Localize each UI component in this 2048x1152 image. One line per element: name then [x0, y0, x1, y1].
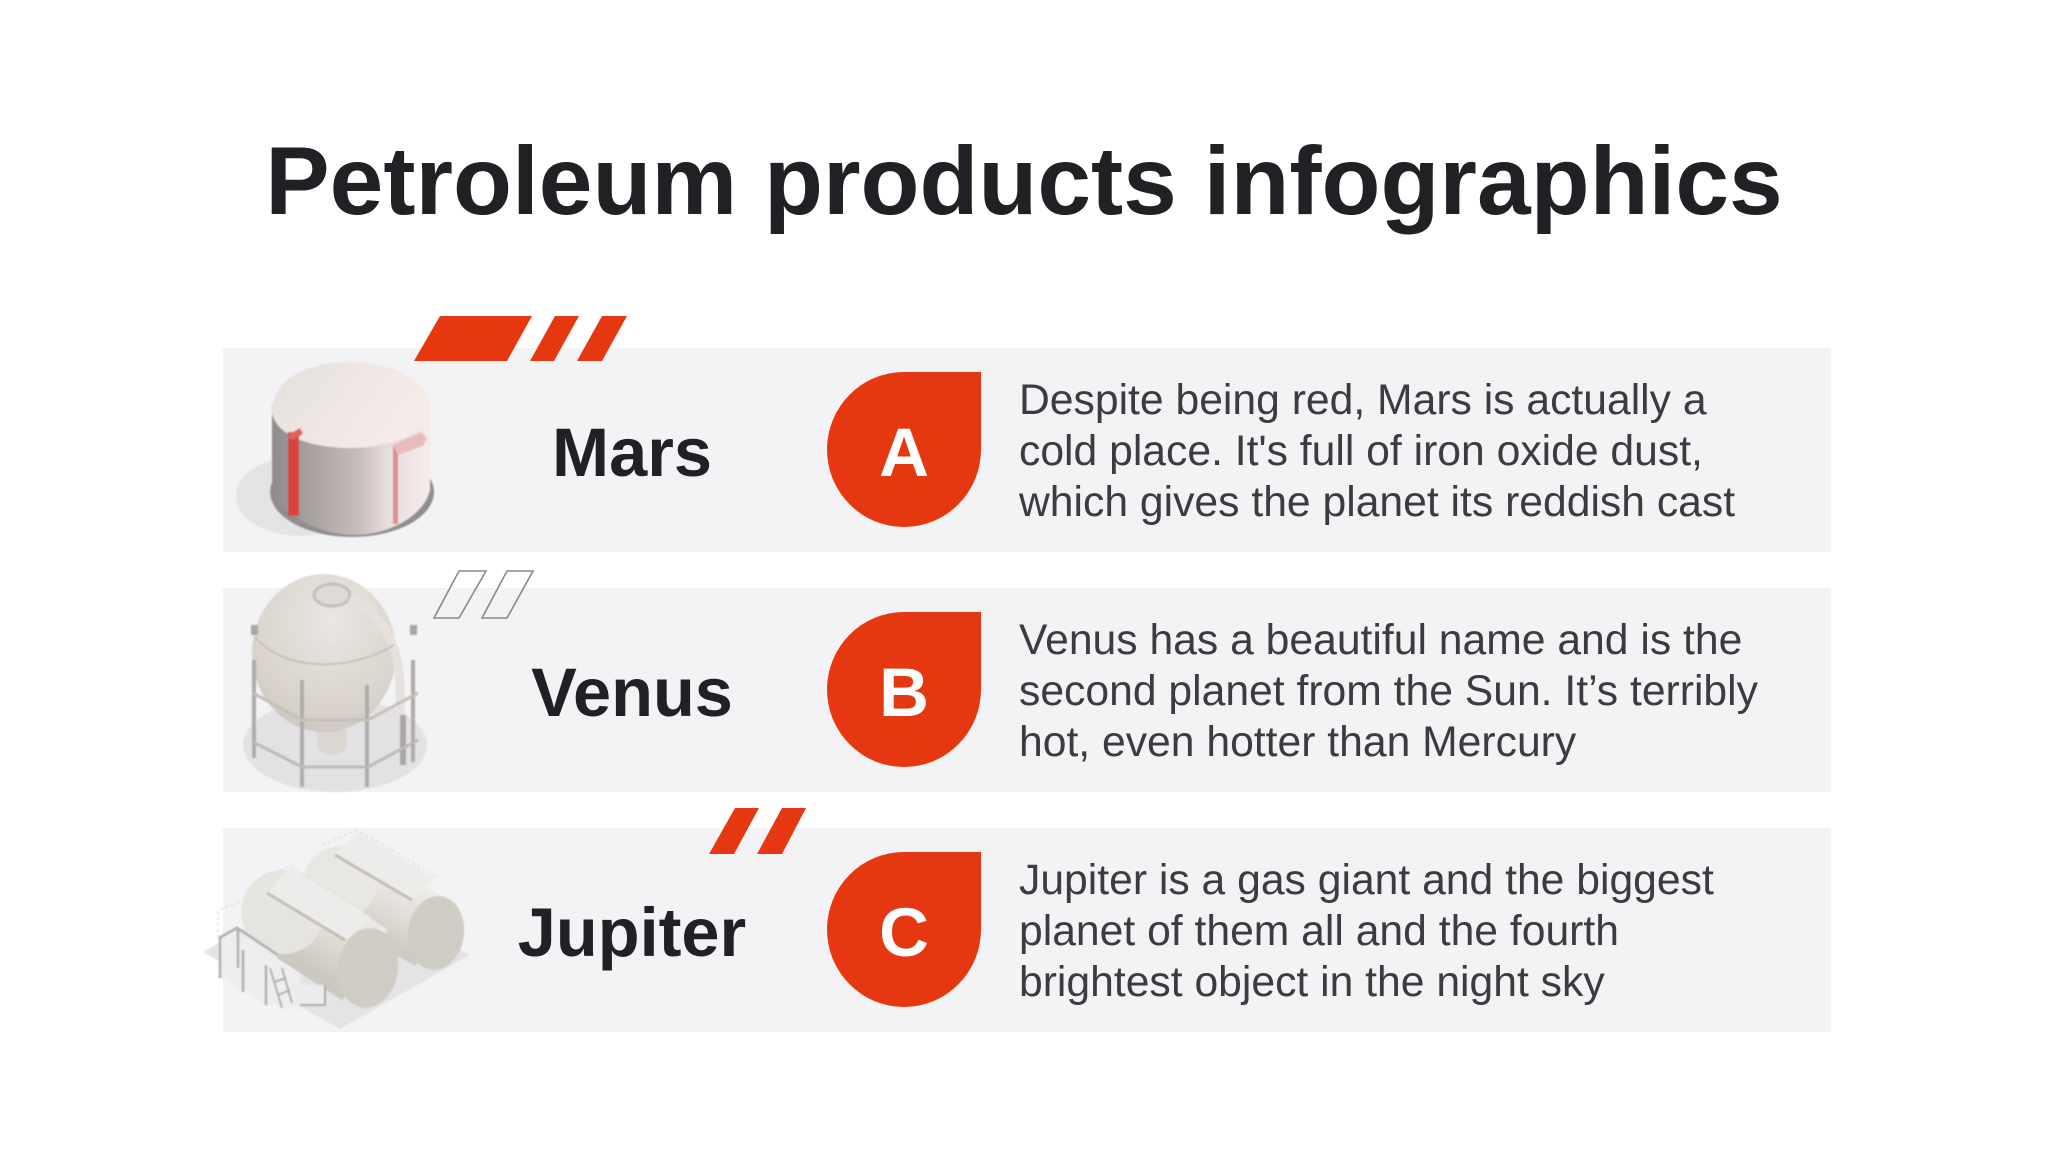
label: Mars: Mars	[552, 414, 712, 491]
panel: Venus	[223, 588, 1831, 792]
text: Venus description: second planet from the Sun. It’s terribly	[1019, 667, 1758, 715]
text: Jupiter description: Jupiter is a gas giant and the biggest	[1019, 856, 1714, 904]
panel: Jupiter	[223, 828, 1831, 1032]
text: Venus description: hot, even hotter than Mercury	[1019, 718, 1576, 766]
text: Mars description: which gives the planet its reddish cast	[1019, 478, 1735, 526]
badge: B	[827, 612, 981, 767]
text: Jupiter description: brightest object in the night sky	[1019, 958, 1605, 1006]
text: Mars description: Despite being red, Mars is actually a	[1019, 376, 1707, 424]
text: Venus description	[1019, 616, 1758, 766]
badge: C	[827, 852, 981, 1007]
text: Mars description: cold place. It's full of iron oxide dust,	[1019, 427, 1703, 475]
text: Jupiter description	[1019, 856, 1714, 1006]
text: Mars description	[1019, 376, 1735, 526]
panel: Mars	[223, 348, 1831, 552]
text: Jupiter description: planet of them all and the fourth	[1019, 907, 1619, 955]
title: Petroleum products infographics	[265, 128, 1783, 235]
badge: A: A	[879, 414, 929, 491]
text: Venus description: Venus has a beautiful name and is the	[1019, 616, 1742, 664]
badge: C: C	[879, 894, 929, 971]
badge: A	[827, 372, 981, 527]
label: Jupiter: Jupiter	[518, 894, 746, 971]
label: Venus: Venus	[531, 654, 733, 731]
badge: B: B	[879, 654, 929, 731]
